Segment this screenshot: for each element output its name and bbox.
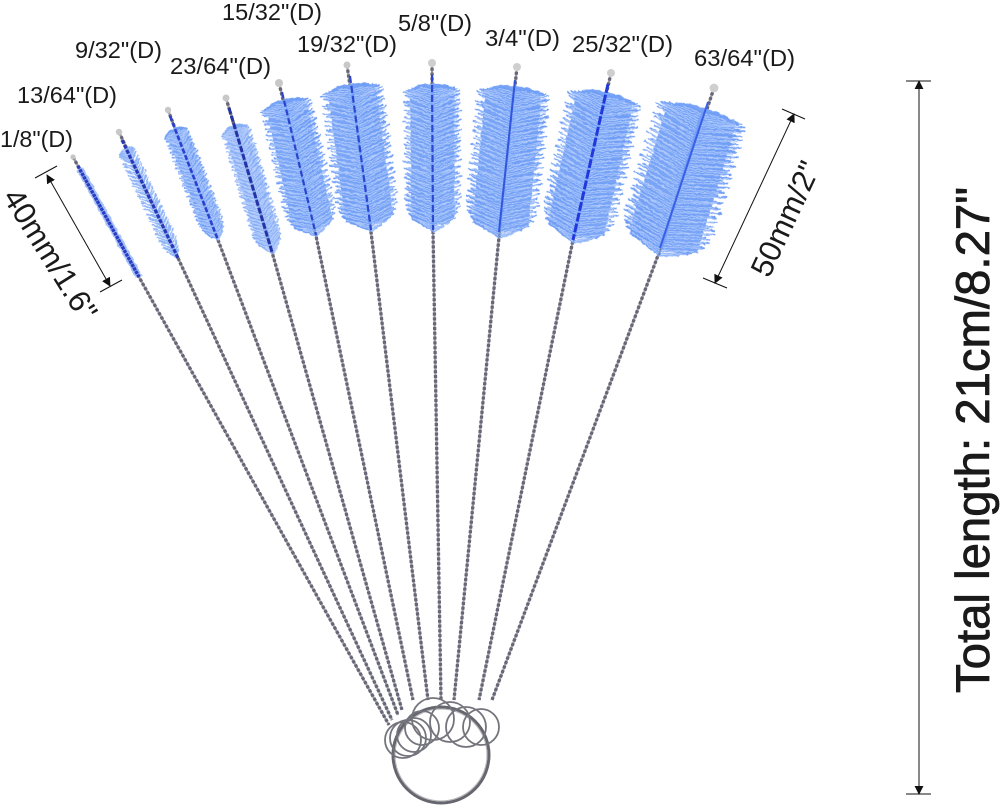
size labels: 13/64"(D) <box>17 82 117 108</box>
dimension: bristle length 50mm <box>703 109 827 288</box>
brush 2: 13/64 inch <box>116 129 392 720</box>
size labels: 25/32"(D) <box>572 31 673 57</box>
brush 4: 23/64 inch <box>219 94 402 710</box>
brush 6: 19/32 inch <box>319 62 428 700</box>
brush 3: 9/32 inch <box>162 107 398 715</box>
size labels: 5/8"(D) <box>398 10 472 36</box>
brush 8: 3/4 inch <box>454 63 552 700</box>
size labels: 3/4"(D) <box>485 25 560 51</box>
brush 10: 63/64 inch <box>492 84 750 700</box>
brush 9: 25/32 inch <box>479 69 644 700</box>
size labels <box>0 0 795 152</box>
key rings <box>385 698 499 803</box>
size labels: 1/8"(D) <box>0 126 73 152</box>
size labels: 23/64"(D) <box>170 53 271 79</box>
dimension: total length: Total length: 21cm/8.27" <box>946 187 999 693</box>
size labels: 19/32"(D) <box>297 31 397 57</box>
brush 1: 1/8 inch <box>70 154 389 725</box>
size labels: 63/64"(D) <box>694 45 795 71</box>
size labels: 9/32"(D) <box>75 37 162 63</box>
brush 5: 15/32 inch <box>258 79 413 700</box>
dimension: bristle length 50mm: 50mm/2" <box>744 156 827 282</box>
brush 7: 5/8 inch <box>403 59 462 700</box>
